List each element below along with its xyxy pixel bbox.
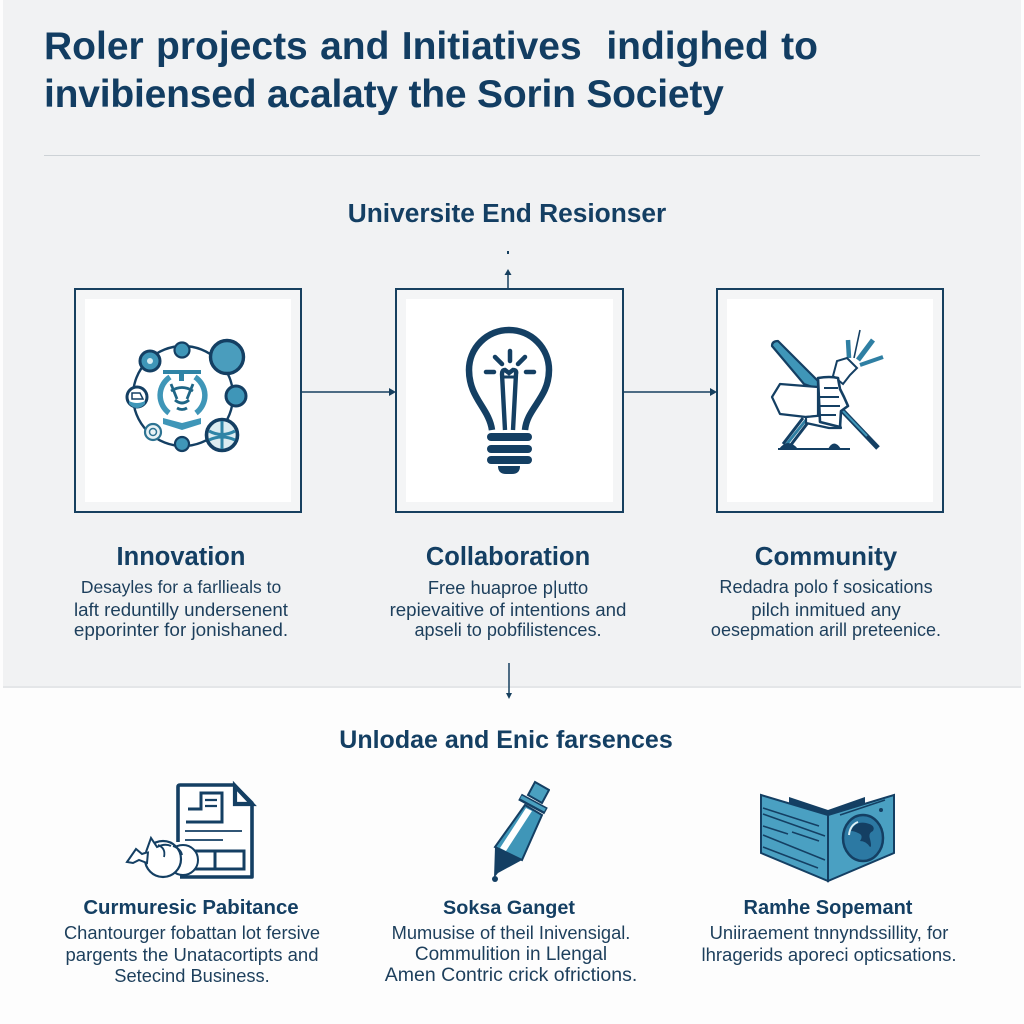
heading: Soksa Ganget — [443, 897, 575, 919]
body text — [711, 577, 941, 640]
body text: pargents the Unatacortipts and — [66, 944, 318, 964]
body text: Free huaproe p|utto — [428, 577, 588, 598]
item: curmuresic pabitance — [64, 897, 320, 986]
body text: Redadra polo f sosications — [719, 577, 933, 597]
divider — [44, 155, 980, 156]
label: innovation — [74, 543, 288, 641]
body text: apseli to pobfilistences. — [414, 620, 602, 640]
heading: Collaboration — [426, 543, 590, 571]
body text: Amen Contric crick ofrictions. — [385, 964, 637, 986]
panel: upper background — [3, 0, 1021, 688]
arrow: innovation to collaboration — [302, 388, 395, 396]
heading: Curmuresic Pabitance — [83, 897, 299, 919]
icon: light bulb — [466, 326, 552, 474]
body text — [74, 577, 288, 641]
item: soksa ganget — [384, 897, 637, 986]
label: community — [711, 543, 941, 640]
body text: lhragerids aporeci opticsations. — [701, 944, 957, 964]
heading: lower section: Unlodae and Enic farsences — [339, 726, 673, 754]
icon: open book with globe — [760, 794, 895, 882]
body text: Commulition in Llengal — [415, 944, 607, 964]
icon: marker pen — [492, 780, 550, 882]
panel: innovation box — [74, 288, 302, 513]
body text: Uniiraement tnnyndssillity, for — [710, 922, 948, 943]
heading: Community — [755, 543, 897, 571]
arrow: collaboration to community — [624, 388, 716, 396]
body text: pilch inmitued any — [751, 598, 901, 620]
body text: oesepmation arill preteenice. — [711, 620, 941, 640]
body text: Setecind Business. — [114, 965, 270, 986]
heading: Innovation — [117, 543, 245, 571]
icon: hand gripping tool — [770, 330, 884, 450]
title: Roler projects and Initiatives indighed to — [44, 25, 818, 68]
icon: document with fruit — [125, 780, 257, 879]
panel: collaboration box — [395, 288, 624, 513]
icon: network ring — [126, 338, 248, 452]
title — [44, 25, 818, 116]
body text: Chantourger fobattan lot fersive — [64, 922, 320, 943]
item: ramhe sopemant — [701, 897, 957, 965]
panel: community box — [716, 288, 944, 513]
body text — [390, 577, 626, 640]
arrow: up to heading — [504, 251, 512, 288]
title: invibiensed acalaty the Sorin Society — [44, 73, 724, 116]
body text — [64, 922, 320, 986]
label: collaboration — [390, 543, 626, 640]
body text: epporinter for jonishaned. — [74, 620, 288, 641]
body text: Desayles for a farllieals to — [81, 577, 281, 597]
body text: repievaitive of intentions and — [390, 598, 626, 620]
body text: laft reduntilly undersenent — [74, 598, 288, 620]
heading: Ramhe Sopemant — [744, 897, 912, 919]
body text — [384, 922, 637, 986]
body text — [701, 922, 957, 965]
arrow: down to lower section — [506, 663, 512, 699]
body text: Mumusise of theil Inivensigal. — [392, 922, 630, 943]
heading: upper section: Universite End Resionser — [348, 198, 666, 228]
